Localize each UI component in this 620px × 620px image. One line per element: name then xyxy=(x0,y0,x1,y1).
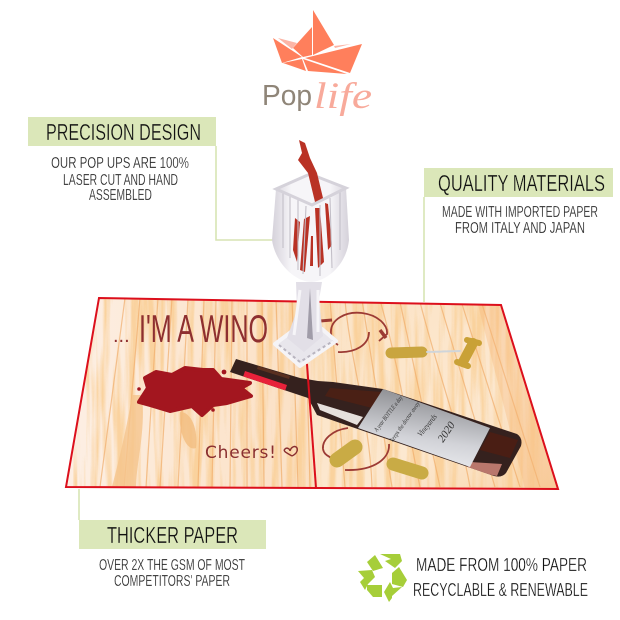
bottle label: Vineyards xyxy=(416,412,439,438)
text block: quality materials xyxy=(442,204,598,237)
wine inside the bowl xyxy=(293,203,332,272)
glass stem xyxy=(279,282,333,362)
glass base xyxy=(275,329,336,366)
text block: precision design xyxy=(51,155,189,204)
logo wordmark xyxy=(262,76,372,117)
leader lines xyxy=(79,146,424,520)
heading on card: I'm a wino xyxy=(113,308,268,351)
logo: Poplife xyxy=(262,10,372,117)
bottle label: keeps the doctor away xyxy=(389,401,422,443)
heading band: precision design xyxy=(28,117,216,146)
heading on card: I'm a wino: ... xyxy=(113,325,130,347)
heading band: thicker paper xyxy=(79,520,266,549)
pop-up wine glass xyxy=(272,140,349,366)
bottle label: A year BOTTLE a day xyxy=(373,395,405,434)
icon: origami paper boat xyxy=(273,10,362,74)
text: cheers with heart: Cheers! xyxy=(205,443,276,463)
corks xyxy=(337,447,422,473)
wine splash xyxy=(298,140,323,202)
text block: thicker paper xyxy=(99,557,245,590)
heading on card: I'm a wino: I'M A WINO xyxy=(139,308,268,351)
heading band: thicker paper: THICKER PAPER xyxy=(107,522,238,548)
logo wordmark: life xyxy=(314,76,372,117)
text: made from 100% paper xyxy=(413,555,588,600)
glass bowl xyxy=(272,174,349,282)
logo wordmark: Pop xyxy=(262,80,312,112)
card red border xyxy=(66,298,558,489)
wine stain xyxy=(137,368,251,415)
bottle label xyxy=(358,389,490,467)
heading band: precision design: PRECISION DESIGN xyxy=(46,119,201,145)
panel: thicker paper xyxy=(79,520,266,590)
text block: precision design: ASSEMBLED xyxy=(89,187,152,204)
wine bottle xyxy=(230,359,522,477)
text block: precision design: OUR POP UPS ARE 100% xyxy=(51,155,189,172)
text block: precision design: LASER CUT AND HAND xyxy=(63,172,178,189)
icon: recycling arrows xyxy=(358,554,407,602)
panel: precision design xyxy=(28,117,216,204)
bottle label: 2020 xyxy=(436,419,458,445)
pop-up card xyxy=(60,290,565,495)
panel: quality materials xyxy=(424,168,613,237)
text block: thicker paper: COMPETITORS' PAPER xyxy=(114,573,230,590)
corkscrew with cork xyxy=(391,340,479,366)
text block: thicker paper: OVER 2X THE GSM OF MOST xyxy=(99,557,245,574)
card wood panels xyxy=(67,299,557,488)
wine ring top xyxy=(320,313,387,352)
wine ring bottom xyxy=(323,428,389,470)
